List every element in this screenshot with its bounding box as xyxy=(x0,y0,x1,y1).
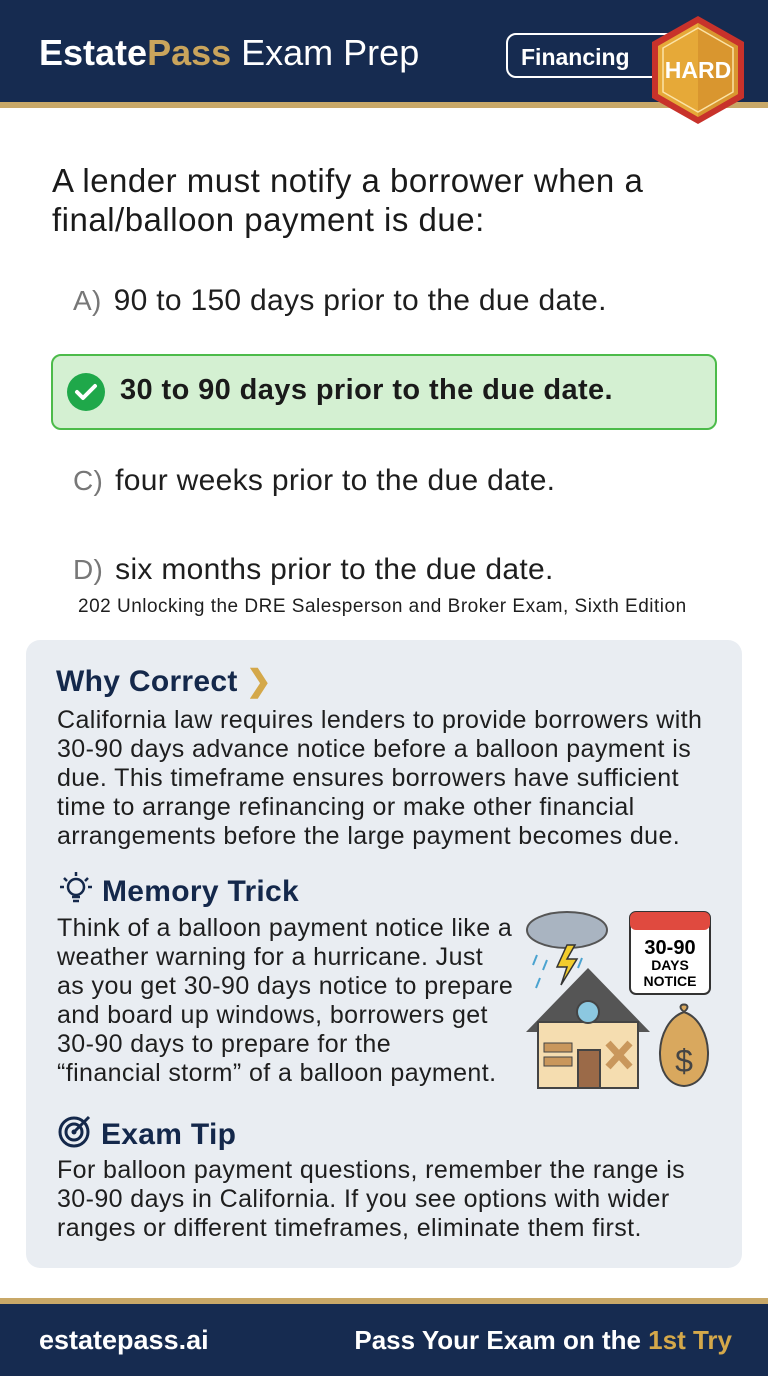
question: final/balloon payment is due: xyxy=(52,201,485,238)
memory trick text: as you get 30-90 days notice to prepare xyxy=(57,972,513,1000)
why correct text: 30-90 days advance notice before a balloon payment is xyxy=(57,735,691,763)
memory trick text: weather warning for a hurricane. Just xyxy=(57,943,483,971)
difficulty badge: HARD xyxy=(665,57,731,83)
why correct text: California law requires lenders to provide borrowers with xyxy=(57,706,702,734)
why correct text: due. This timeframe ensures borrowers have sufficient xyxy=(57,764,679,792)
source: 202 Unlocking the DRE Salesperson and Broker Exam, Sixth Edition xyxy=(78,596,687,617)
why correct text: arrangements before the large payment becomes due. xyxy=(57,822,680,850)
why correct text: time to arrange refinancing or make other financial xyxy=(57,793,635,821)
question xyxy=(52,162,643,238)
option B correct: 30 to 90 days prior to the due date. xyxy=(120,374,613,406)
memory trick text xyxy=(57,914,513,1087)
footer tagline: Pass Your Exam on the 1st Try xyxy=(354,1325,732,1355)
category pill xyxy=(506,33,676,78)
illustration: house storm calendar money: NOTICE xyxy=(644,973,696,989)
exam tip text: 30-90 days in California. If you see options with wider xyxy=(57,1185,670,1213)
exam tip heading: Exam Tip xyxy=(101,1118,236,1151)
difficulty badge xyxy=(652,16,744,124)
option D: D) six months prior to the due date. xyxy=(73,553,554,586)
exam tip text xyxy=(57,1156,685,1242)
footer url: estatepass.ai xyxy=(39,1325,209,1355)
header bar xyxy=(0,0,768,108)
memory trick text: Think of a balloon payment notice like a xyxy=(57,914,512,942)
option A: A) 90 to 150 days prior to the due date. xyxy=(73,284,607,317)
illustration: house storm calendar money: 30-90 xyxy=(644,937,696,959)
check icon xyxy=(67,373,105,411)
memory trick heading: Memory Trick xyxy=(102,875,299,908)
exam tip text: ranges or different timeframes, eliminate them first. xyxy=(57,1214,642,1242)
footer xyxy=(0,1298,768,1376)
memory trick text: 30-90 days to prepare for the xyxy=(57,1030,391,1058)
illustration: house storm calendar money xyxy=(526,911,711,1089)
option C: C) four weeks prior to the due date. xyxy=(73,464,555,497)
memory trick text: “financial storm” of a balloon payment. xyxy=(57,1059,496,1087)
question: A lender must notify a borrower when a xyxy=(52,162,643,199)
explanation panel xyxy=(26,640,742,1268)
why correct text xyxy=(57,706,702,850)
brand title: EstatePass Exam Prep xyxy=(39,32,419,73)
illustration: house storm calendar money: DAYS xyxy=(651,957,689,973)
memory trick text: and board up windows, borrowers get xyxy=(57,1001,488,1029)
why correct heading: Why Correct ❯ xyxy=(56,665,272,698)
option B correct xyxy=(51,354,717,430)
exam tip text: For balloon payment questions, remember the range is xyxy=(57,1156,685,1184)
illustration: house storm calendar money: $ xyxy=(675,1043,693,1079)
category pill: Financing xyxy=(521,44,630,70)
